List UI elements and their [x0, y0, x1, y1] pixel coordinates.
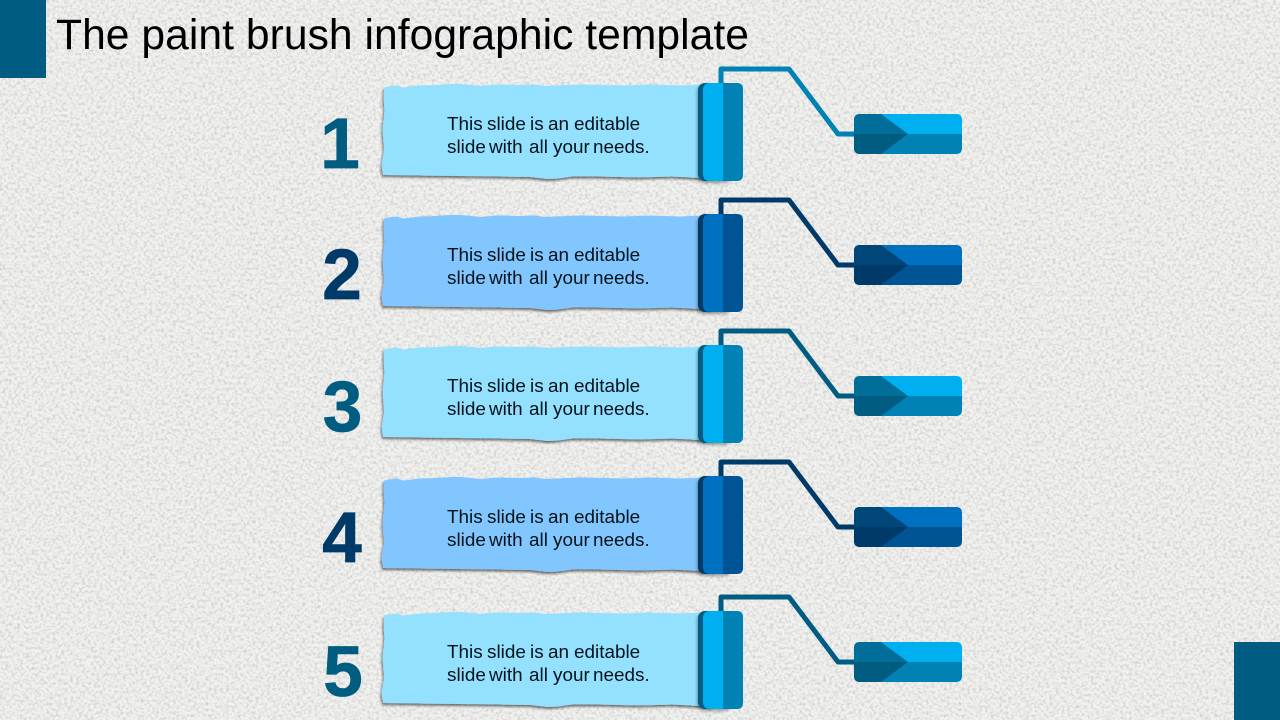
text 3: slide — [487, 376, 526, 397]
roller 5 — [698, 611, 743, 709]
handle line 3 — [721, 331, 856, 396]
text 5: editable — [574, 642, 640, 663]
text 4: all — [529, 530, 548, 551]
torn paint stroke 3 — [382, 346, 715, 441]
text 1: all — [529, 137, 548, 158]
text 5: slide — [487, 642, 526, 663]
row 5 — [323, 597, 962, 712]
text 2: This — [447, 245, 483, 266]
text 2: slide — [487, 245, 526, 266]
text 2: editable — [574, 245, 640, 266]
text 5: is — [530, 642, 544, 663]
text 4: needs. — [593, 530, 650, 551]
roller 3 — [698, 345, 743, 443]
text 3: with — [488, 399, 523, 420]
torn paint stroke 5 — [382, 612, 715, 707]
corner block: bottom right — [1234, 642, 1280, 720]
text 2: is — [530, 245, 544, 266]
text 1: your — [553, 137, 590, 158]
text 1: with — [488, 137, 523, 158]
torn paint stroke 4 — [382, 477, 715, 572]
row 3 — [323, 331, 962, 447]
text 4: slide — [487, 507, 526, 528]
row 1 — [320, 69, 962, 184]
handle line 2 — [721, 200, 856, 265]
text 2: with — [488, 268, 523, 289]
text 5: all — [529, 665, 548, 686]
text 4: This — [447, 507, 483, 528]
number 1: 1 — [320, 105, 360, 184]
roller 2 — [698, 214, 743, 312]
text 2: needs. — [593, 268, 650, 289]
handle line 1 — [721, 69, 856, 134]
number 5: 5 — [323, 633, 363, 712]
text 1: This — [447, 114, 483, 135]
text 3: an — [548, 376, 569, 397]
text 1: needs. — [593, 137, 650, 158]
text 5: slide — [447, 665, 486, 686]
handle grip 5 — [854, 642, 962, 682]
text 5: an — [548, 642, 569, 663]
handle line 5 — [721, 597, 856, 662]
text 4: your — [553, 530, 590, 551]
text 5: This — [447, 642, 483, 663]
row 2 — [322, 200, 962, 315]
text 3: needs. — [593, 399, 650, 420]
torn paint stroke 1 — [382, 84, 715, 179]
text 5: your — [553, 665, 590, 686]
roller 1 — [698, 83, 743, 181]
number 2: 2 — [322, 236, 362, 315]
handle grip 3 — [854, 376, 962, 416]
text 3: all — [529, 399, 548, 420]
text 5: with — [488, 665, 523, 686]
handle grip 4 — [854, 507, 962, 547]
text 2: all — [529, 268, 548, 289]
text 1: editable — [574, 114, 640, 135]
torn paint stroke 2 — [382, 215, 715, 310]
corner block: top left — [0, 0, 46, 78]
number 4: 4 — [322, 499, 362, 578]
text 2: an — [548, 245, 569, 266]
handle grip 1 — [854, 114, 962, 154]
handle line 4 — [721, 462, 856, 527]
number 3: 3 — [323, 368, 362, 447]
text 1: slide — [447, 137, 486, 158]
text 3: is — [530, 376, 544, 397]
roller 4 — [698, 476, 743, 574]
text 5: needs. — [593, 665, 650, 686]
text 4: an — [548, 507, 569, 528]
text 4: editable — [574, 507, 640, 528]
title: The paint brush infographic template — [56, 11, 749, 59]
text 3: slide — [447, 399, 486, 420]
text 1: slide — [487, 114, 526, 135]
text 2: your — [553, 268, 590, 289]
text 2: slide — [447, 268, 486, 289]
text 4: with — [488, 530, 523, 551]
text 1: is — [530, 114, 544, 135]
handle grip 2 — [854, 245, 962, 285]
text 3: This — [447, 376, 483, 397]
text 3: editable — [574, 376, 640, 397]
text 1: an — [548, 114, 569, 135]
text 4: is — [530, 507, 544, 528]
row 4 — [322, 462, 962, 578]
text 3: your — [553, 399, 590, 420]
text 4: slide — [447, 530, 486, 551]
